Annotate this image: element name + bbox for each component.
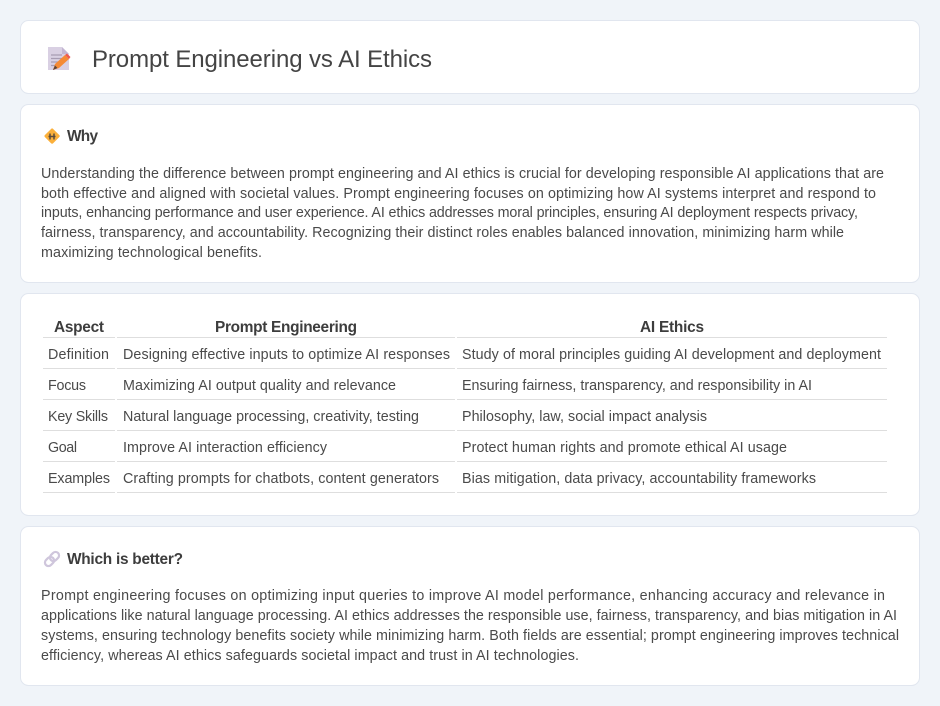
table row: definition: Study of moral principles guiding AI development and deployment — [462, 347, 881, 363]
table row: definition: Designing effective inputs to optimize AI responses — [123, 347, 450, 363]
text block: which is better paragraph: systems, ensuring technology benefits society while minimizing harm. Both fields are essential; prompt engineering improves technical — [41, 628, 899, 644]
table row: focus: Maximizing AI output quality and relevance — [123, 378, 396, 394]
table row: key skills: Philosophy, law, social impact analysis — [462, 409, 707, 425]
table row: focus: Focus — [48, 378, 86, 394]
table header row: Prompt Engineering — [215, 319, 357, 336]
table row: key skills — [48, 409, 707, 425]
text block: why paragraph: maximizing technological benefits. — [41, 245, 262, 261]
panel: comparison table — [20, 294, 920, 516]
icon: diamond warning sign — [44, 128, 60, 144]
table header row — [54, 319, 704, 336]
table row: goal: Protect human rights and promote ethical AI usage — [462, 440, 787, 456]
text block: why paragraph: inputs, enhancing performance and user experience. AI ethics addresses moral principles, ensuring AI deployment respects privacy, — [41, 205, 858, 221]
text block: which is better paragraph — [41, 588, 899, 664]
text block: which is better paragraph: efficiency, whereas AI ethics safeguards societal impact and trust in AI technologies. — [41, 648, 579, 664]
table row: key skills: Natural language processing, creativity, testing — [123, 409, 419, 425]
table header row: Aspect — [54, 319, 104, 336]
heading: why: Why — [67, 128, 98, 145]
heading: which is better: Which is better? — [67, 551, 183, 568]
table row: key skills: Key Skills — [48, 409, 108, 425]
text block: why paragraph: fairness, transparency, and accountability. Recognizing their distinct roles enables balanced innovation, minimizing harm while — [41, 225, 844, 241]
icon: document with pencil — [48, 47, 70, 70]
table row: goal — [48, 440, 787, 456]
table row: examples: Bias mitigation, data privacy, accountability frameworks — [462, 471, 816, 487]
table row: goal: Goal — [48, 440, 77, 456]
table row: definition — [48, 347, 881, 363]
text block: why paragraph: Understanding the difference between prompt engineering and AI ethics is crucial for developing responsible AI applications that are — [41, 166, 884, 182]
icon: link — [43, 550, 61, 568]
text block: which is better paragraph: applications like natural language processing. AI ethics addresses the responsible use, fairness, transparency, and bias mitigation in AI — [41, 608, 897, 624]
table row: definition: Definition — [48, 347, 109, 363]
panel: which is better — [20, 526, 920, 686]
title: Prompt Engineering vs AI Ethics — [92, 46, 432, 73]
table row: examples — [48, 471, 816, 487]
table row: focus: Ensuring fairness, transparency, and responsibility in AI — [462, 378, 812, 394]
text block: why paragraph: both effective and aligned with societal values. Prompt engineering focuses on optimizing how AI systems interpret and respond to — [41, 186, 876, 202]
text block: which is better paragraph: Prompt engineering focuses on optimizing input queries to improve AI model performance, enhancing accuracy and relevance in — [41, 588, 885, 604]
table row: examples: Examples — [48, 471, 110, 487]
table row: goal: Improve AI interaction efficiency — [123, 440, 328, 456]
panel: header — [20, 20, 920, 94]
text block: why paragraph — [41, 166, 884, 261]
panel: why — [20, 104, 920, 282]
table row: examples: Crafting prompts for chatbots, content generators — [123, 471, 439, 487]
table header row: AI Ethics — [640, 319, 704, 336]
table row: focus — [48, 378, 812, 394]
